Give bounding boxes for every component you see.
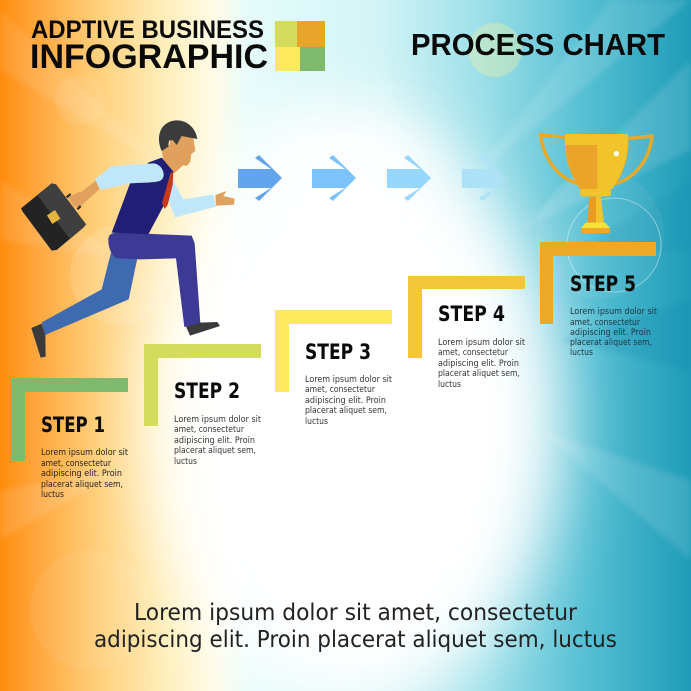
step 5 (540, 242, 657, 358)
step 4 text: adipiscing elit. Proin (438, 359, 519, 369)
title: Adptive Business Infographic (30, 16, 268, 76)
heading: Process Chart: PROCESS CHART (411, 27, 665, 62)
footer text: Lorem ipsum dolor sit amet, consectetur (134, 598, 577, 626)
step 5 bracket (540, 242, 656, 324)
step 2 text: adipiscing elit. Proin (174, 436, 255, 446)
step 3 (275, 310, 392, 427)
step 2 text: luctus (174, 457, 197, 467)
step 2 text: Lorem ipsum dolor sit (174, 415, 261, 425)
neck (162, 140, 183, 173)
step 3 text (305, 375, 392, 427)
step 3 label: STEP 3 (305, 340, 371, 364)
step 2 label: STEP 2 (174, 379, 240, 403)
step 5 text: adipiscing elit. Proin (570, 328, 651, 338)
briefcase light side (38, 183, 86, 238)
step 4 text: Lorem ipsum dolor sit (438, 338, 525, 348)
step 5 text: placerat aliquet sem, (570, 338, 652, 348)
hand (215, 191, 235, 206)
front arm shirt (168, 175, 216, 217)
step 1 text: luctus (41, 490, 64, 500)
step 1 text: placerat aliquet sem, (41, 480, 123, 490)
step 1 text (41, 448, 128, 500)
back leg (42, 250, 137, 335)
briefcase clasp (47, 210, 60, 224)
step 1 label: STEP 1 (41, 413, 105, 437)
step 2 text (174, 415, 261, 467)
step 3 text: amet, consectetur (305, 385, 375, 395)
tie (162, 172, 173, 209)
arrow 2 (312, 155, 356, 201)
step 4 text: luctus (438, 380, 461, 390)
step 5 text (570, 307, 657, 358)
head face (170, 133, 195, 166)
footer text (94, 598, 617, 653)
step 4 label: STEP 4 (438, 302, 505, 326)
back hand (68, 192, 86, 207)
step 4 text: amet, consectetur (438, 348, 508, 358)
step 4 text: placerat aliquet sem, (438, 369, 520, 379)
step 1 text: adipiscing elit. Proin (41, 469, 122, 479)
step 5 text: luctus (570, 348, 593, 358)
step 1 text: Lorem ipsum dolor sit (41, 448, 128, 458)
step 5 text: amet, consectetur (570, 318, 640, 328)
back shoe (31, 324, 46, 358)
step 4 bracket (408, 276, 525, 358)
arrow 1 (238, 155, 282, 201)
back arm (75, 181, 99, 205)
step 2 (144, 344, 261, 467)
step 4 (408, 276, 525, 390)
arrow 4 (462, 155, 506, 201)
front shoe (186, 322, 220, 336)
arrow 3 (387, 155, 431, 201)
step 2 bracket (144, 344, 261, 426)
step 2 text: amet, consectetur (174, 425, 244, 435)
step 2 text: placerat aliquet sem, (174, 446, 256, 456)
step 3 text: luctus (305, 417, 328, 427)
step 4 text (438, 338, 525, 390)
step 3 text: adipiscing elit. Proin (305, 396, 386, 406)
step 1 bracket (11, 378, 128, 461)
businessman running with briefcase (21, 120, 235, 358)
step 1 text: amet, consectetur (41, 459, 111, 469)
step 3 bracket (275, 310, 392, 392)
step 5 text: Lorem ipsum dolor sit (570, 307, 657, 317)
hair (159, 120, 197, 151)
title: Adptive Business Infographic: INFOGRAPHIC (30, 38, 268, 76)
icon: logo squares (275, 21, 325, 71)
step 5 label: STEP 5 (570, 272, 636, 296)
briefcase handle (67, 194, 81, 209)
step 3 text: Lorem ipsum dolor sit (305, 375, 392, 385)
step 3 text: placerat aliquet sem, (305, 406, 387, 416)
torso vest (112, 158, 173, 234)
footer text: adipiscing elit. Proin placerat aliquet sem, luctus (94, 625, 617, 653)
icon: trophy (541, 134, 652, 233)
title: Adptive Business Infographic: ADPTIVE BUSINESS (31, 16, 264, 44)
front leg (108, 233, 200, 327)
step 1 (11, 378, 128, 500)
back arm shirt (95, 163, 164, 190)
briefcase (21, 183, 86, 251)
